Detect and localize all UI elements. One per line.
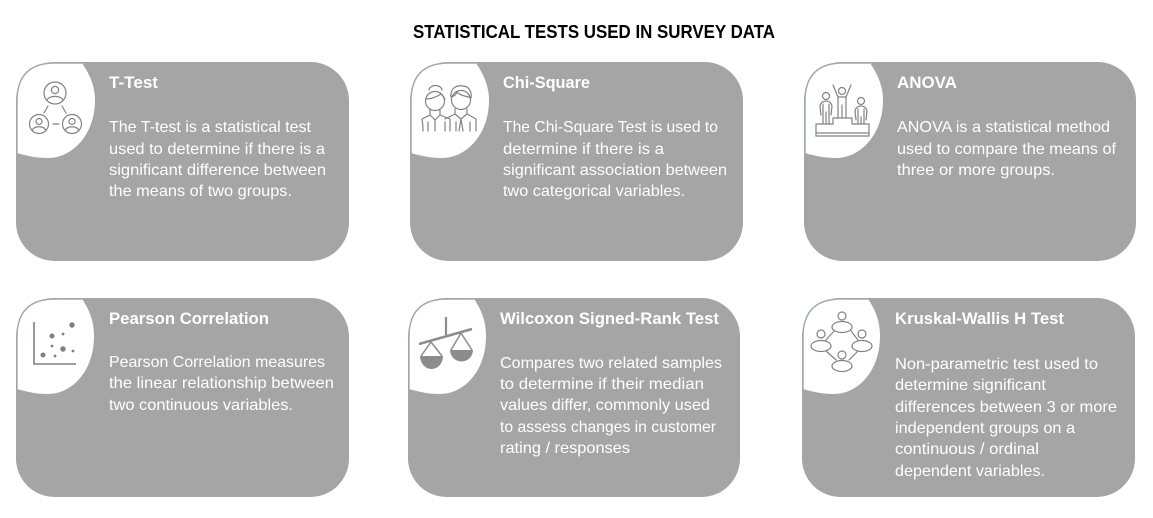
- heading: Pearson Correlation: Pearson Correlation: [109, 310, 269, 328]
- heading: Kruskal-Wallis H Test: Kruskal-Wallis H Test: [895, 310, 1064, 328]
- heading: Chi-Square: Chi-Square: [503, 74, 590, 92]
- text: T-Test description: used to determine if there is a: [109, 141, 325, 158]
- text: Chi-Square description: significant association between: [503, 162, 727, 179]
- text: Kruskal-Wallis description: differences between 3 or more: [895, 399, 1117, 416]
- text: ANOVA description: used to compare the means of: [897, 141, 1117, 158]
- panel: T-Test: [16, 62, 348, 260]
- text: Wilcoxon description: values differ, commonly used: [500, 397, 710, 414]
- text: Kruskal-Wallis description: independent groups on a: [895, 420, 1075, 437]
- text: Wilcoxon description: [500, 355, 722, 457]
- icon: podium with figures: [816, 85, 869, 136]
- text: ANOVA description: three or more groups.: [897, 162, 1055, 179]
- text: ANOVA description: [897, 119, 1117, 179]
- panel: Pearson Correlation: [16, 298, 348, 496]
- panel: Kruskal-Wallis H Test: [802, 298, 1134, 496]
- text: Chi-Square description: two categorical variables.: [503, 183, 685, 200]
- text: Wilcoxon description: Compares two related samples: [500, 355, 722, 372]
- text: Kruskal-Wallis description: continuous / ordinal: [895, 441, 1039, 458]
- text: Chi-Square description: The Chi-Square Test is used to: [503, 119, 718, 136]
- icon: network of people: [811, 312, 872, 372]
- text: Pearson description: [109, 354, 334, 414]
- panel: ANOVA: [804, 62, 1136, 260]
- text: T-Test description: The T-test is a statistical test: [109, 119, 312, 136]
- heading: Wilcoxon Signed-Rank Test: Wilcoxon Signed-Rank Test: [500, 310, 720, 328]
- text: Pearson description: Pearson Correlation measures: [109, 354, 325, 371]
- text: Kruskal-Wallis description: dependent variables.: [895, 463, 1045, 480]
- text: Pearson description: the linear relationship between: [109, 375, 334, 392]
- text: Pearson description: two continuous variables.: [109, 397, 293, 414]
- panel: Chi-Square: [410, 62, 742, 260]
- text: Kruskal-Wallis description: [895, 356, 1117, 480]
- text: T-Test description: [109, 119, 326, 200]
- text: Chi-Square description: [503, 119, 727, 200]
- title: STATISTICAL TESTS USED IN SURVEY DATA: [413, 22, 775, 42]
- text: Kruskal-Wallis description: determine significant: [895, 377, 1047, 394]
- text: Wilcoxon description: to determine if their median: [500, 376, 704, 393]
- icon: two people: [422, 86, 476, 131]
- text: Wilcoxon description: rating / responses: [500, 440, 630, 457]
- text: ANOVA description: ANOVA is a statistical method: [897, 119, 1110, 136]
- heading: T-Test: T-Test: [109, 74, 159, 92]
- heading: ANOVA: ANOVA: [897, 74, 957, 92]
- text: Chi-Square description: determine if there is a: [503, 141, 664, 158]
- text: Wilcoxon description: to assess changes in customer: [500, 419, 716, 436]
- icon: scatter plot: [34, 322, 76, 364]
- text: T-Test description: the means of two groups.: [109, 183, 292, 200]
- icon: balance scale: [419, 317, 473, 369]
- text: T-Test description: significant difference between: [109, 162, 326, 179]
- panel: Wilcoxon Signed-Rank Test: [408, 298, 740, 496]
- icon: connected people: [30, 82, 82, 134]
- text: Kruskal-Wallis description: Non-parametric test used to: [895, 356, 1098, 373]
